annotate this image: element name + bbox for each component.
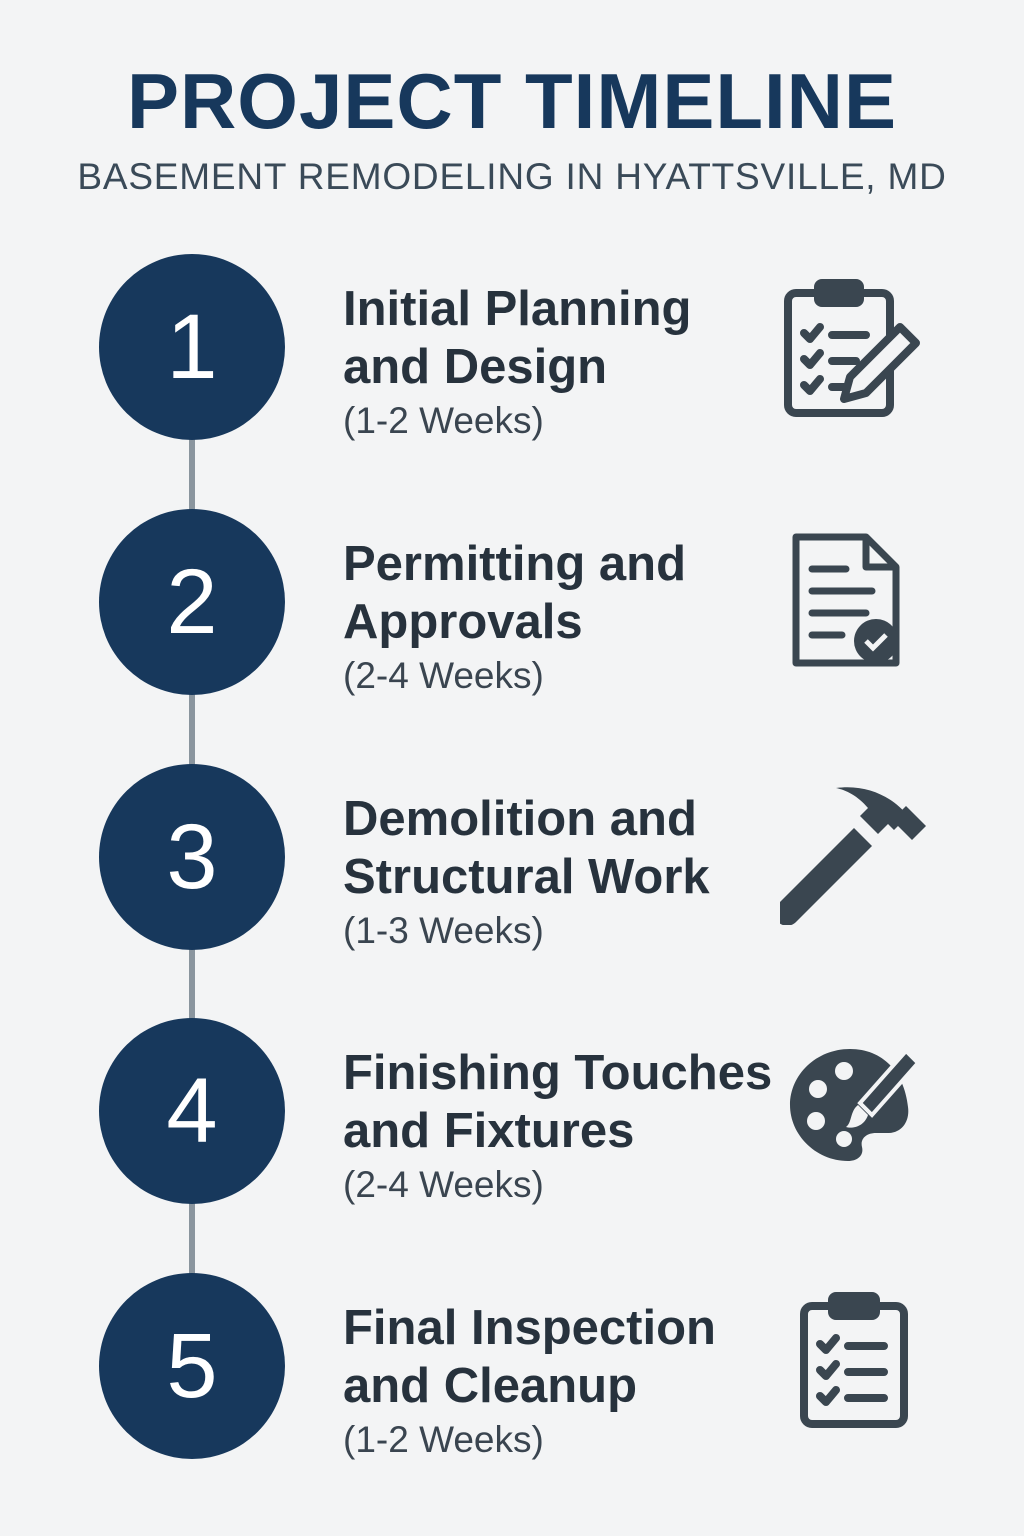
step 5 text: (1-2 Weeks) bbox=[343, 1419, 544, 1460]
subtitle: BASEMENT REMODELING IN HYATTSVILLE, MD bbox=[77, 156, 947, 197]
step 5 text: Final Inspection bbox=[343, 1301, 716, 1355]
timeline connector line bbox=[189, 400, 195, 1320]
step 4 text: and Fixtures bbox=[343, 1104, 634, 1158]
step 1 circle: 1 bbox=[166, 296, 218, 398]
step 1 text bbox=[343, 282, 691, 441]
icon: paint palette and brush bbox=[790, 1049, 916, 1161]
step 1 text: Initial Planning bbox=[343, 282, 691, 336]
step 1 text: and Design bbox=[343, 340, 607, 394]
step 5 text bbox=[343, 1301, 716, 1460]
step 5 text: and Cleanup bbox=[343, 1359, 637, 1413]
step 5 circle: 5 bbox=[166, 1315, 218, 1417]
step 1 circle bbox=[99, 254, 285, 440]
icon: checklist clipboard bbox=[800, 1292, 908, 1428]
step 4 circle: 4 bbox=[166, 1060, 218, 1162]
step 2 text: (2-4 Weeks) bbox=[343, 655, 544, 696]
step 3 circle bbox=[99, 764, 285, 950]
step 5 circle bbox=[99, 1273, 285, 1459]
title: PROJECT TIMELINE bbox=[127, 57, 897, 145]
step 4 text: (2-4 Weeks) bbox=[343, 1164, 544, 1205]
step 1 text: (1-2 Weeks) bbox=[343, 400, 544, 441]
step 4 circle bbox=[99, 1018, 285, 1204]
icon: clipboard with pencil bbox=[784, 279, 920, 417]
step 3 circle: 3 bbox=[166, 806, 218, 908]
step 2 circle: 2 bbox=[166, 551, 218, 653]
step 2 circle bbox=[99, 509, 285, 695]
step 2 text: Permitting and bbox=[343, 537, 686, 591]
step 3 text: Structural Work bbox=[343, 850, 710, 904]
step 3 text: Demolition and bbox=[343, 792, 697, 846]
step 3 text: (1-3 Weeks) bbox=[343, 910, 544, 951]
icon: hammer bbox=[780, 787, 926, 925]
step 4 text bbox=[343, 1046, 772, 1205]
step 4 text: Finishing Touches bbox=[343, 1046, 772, 1100]
step 2 text bbox=[343, 537, 686, 696]
step 2 text: Approvals bbox=[343, 595, 583, 649]
icon: document with badge bbox=[792, 534, 900, 666]
step 3 text bbox=[343, 792, 710, 951]
